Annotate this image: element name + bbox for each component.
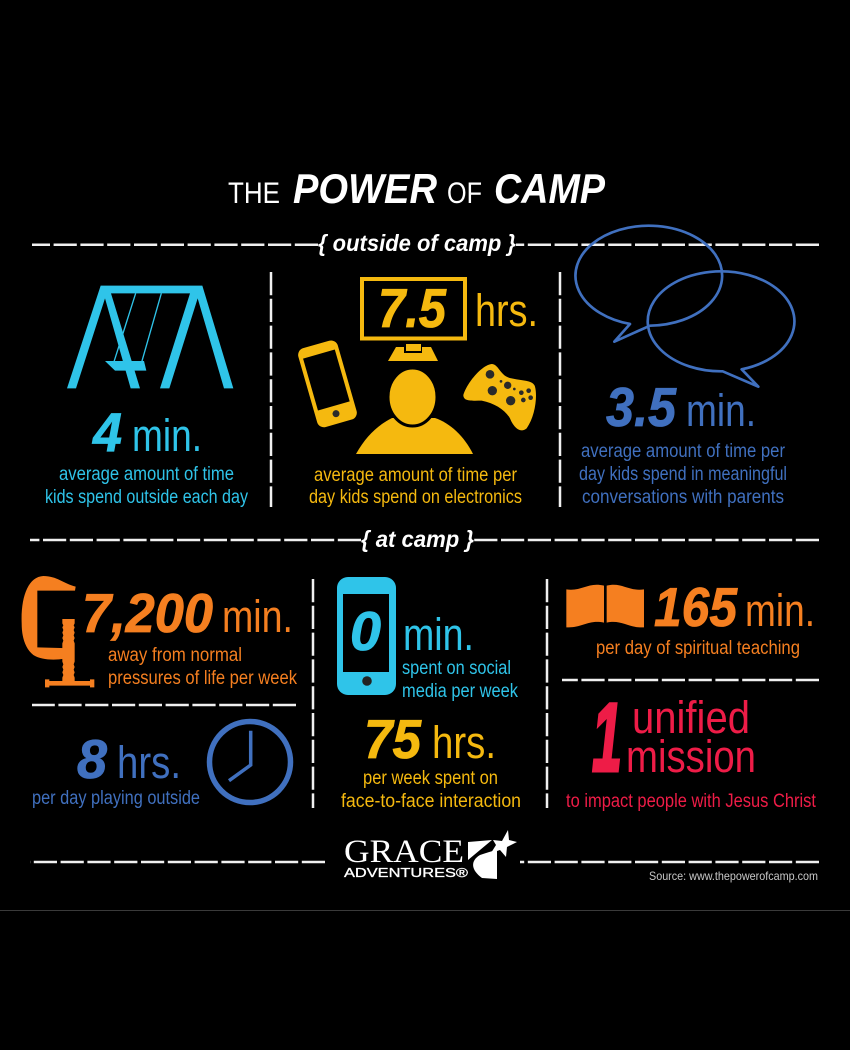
stat: 8 hrs: 8 (77, 728, 107, 790)
panel: away from pressures (22, 576, 297, 689)
section heading: outside of camp: { outside of camp } (318, 230, 516, 256)
logo: Grace Adventures: ADVENTURES® (344, 865, 469, 880)
stat: 75 hrs: hrs. (432, 717, 496, 768)
stat: 8 hrs: hrs. (117, 737, 181, 788)
panel: unified mission (566, 683, 817, 812)
panel: face-to-face (341, 708, 521, 812)
panel: conversations (575, 226, 794, 508)
icon: monitor: 7.5 (378, 277, 447, 339)
icon: speech bubbles (575, 226, 794, 387)
panel: spiritual teaching (566, 576, 815, 659)
caption: outside time (45, 464, 248, 508)
caption: social media: spent on social (402, 658, 511, 679)
stat: 3.5 min: 3.5 (606, 376, 677, 438)
stat: 1: 1 (592, 683, 622, 792)
icon: phone with zero: 0 (350, 600, 381, 662)
caption: conversations: average amount of time per (581, 441, 786, 462)
caption: outside time: kids spend outside each day (45, 487, 248, 508)
panel: electronics (296, 277, 538, 508)
caption: pressures (108, 645, 297, 689)
stat unit: hrs: hrs. (475, 285, 538, 336)
icon: game controller (463, 364, 536, 430)
caption: conversations: day kids spend in meaningful (579, 464, 787, 485)
caption: social media: media per week (402, 681, 518, 702)
caption: face-to-face: per week spent on (363, 768, 498, 789)
title: THE (228, 177, 280, 210)
stat unit: min: min. (403, 609, 474, 660)
stat: 4 min (92, 401, 202, 463)
caption: outside time: average amount of time (59, 464, 234, 485)
caption: conversations: conversations with parents (582, 487, 784, 508)
icon: open book (566, 585, 644, 627)
caption: playing outside: per day playing outside (32, 788, 200, 809)
caption: electronics: day kids spend on electronics (309, 487, 522, 508)
stat: 165 min (654, 576, 815, 638)
logo: Grace Adventures (344, 830, 517, 880)
title: OF (447, 177, 482, 210)
caption: mission: to impact people with Jesus Christ (566, 791, 817, 812)
caption: electronics: average amount of time per (314, 465, 518, 486)
caption: pressures: away from normal (108, 645, 242, 666)
panel: social media (337, 577, 518, 702)
stat: 75 hrs (364, 708, 496, 770)
footer dashed lines (30, 861, 819, 863)
caption: electronics (309, 465, 522, 508)
icon: smartphone (296, 339, 358, 429)
icon: clamp (22, 576, 94, 687)
stat: 165 min: min. (745, 585, 815, 636)
stat text: unified mission: unified (632, 692, 750, 743)
divider lines at camp (32, 579, 819, 808)
stat: 7,200 min (82, 582, 293, 644)
stat: 3.5 min: min. (686, 385, 756, 436)
caption: face-to-face (341, 768, 521, 812)
title: POWER (293, 165, 438, 212)
panel: playing outside (32, 722, 290, 809)
stat: 75 hrs: 75 (364, 708, 422, 770)
stat: 4 min: 4 (92, 401, 122, 463)
caption: social media (402, 658, 518, 702)
icon: person (356, 368, 473, 454)
caption: face-to-face: face-to-face interaction (341, 791, 521, 812)
title (228, 165, 606, 212)
icon: swing set (67, 286, 233, 388)
section heading: at camp: { at camp } (361, 526, 474, 552)
title: CAMP (494, 165, 606, 212)
caption: spiritual teaching: per day of spiritual teaching (596, 638, 800, 659)
divider lines outside of camp (271, 272, 560, 507)
stat: 4 min: min. (132, 410, 202, 461)
stat text: unified mission: mission (626, 731, 756, 782)
logo: Grace Adventures: GRACE (344, 834, 464, 870)
stat: 7,200 min: 7,200 (82, 582, 213, 644)
panel: outside time (45, 286, 248, 508)
stat: 8 hrs (77, 728, 181, 790)
stat text: unified mission (626, 692, 756, 782)
icon: phone with zero (337, 577, 396, 695)
stat: 3.5 min (606, 376, 756, 438)
source note: Source: www.thepowerofcamp.com (649, 869, 818, 883)
caption: conversations (579, 441, 787, 508)
icon: monitor (362, 277, 465, 361)
icon: clock (210, 722, 290, 802)
caption: pressures: pressures of life per week (108, 668, 297, 689)
stat: 165 min: 165 (654, 576, 738, 638)
stat: 7,200 min: min. (222, 591, 293, 642)
